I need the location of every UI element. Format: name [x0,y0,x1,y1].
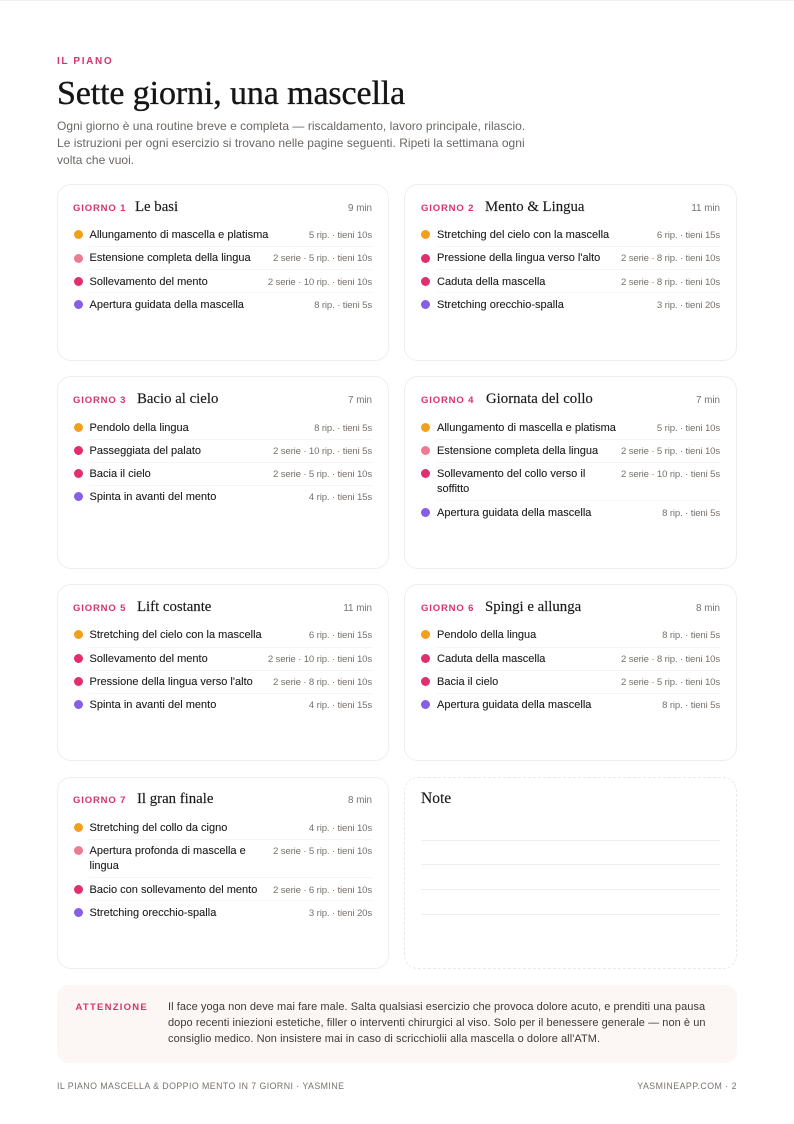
giorno 3 content: Spinta in avanti del mento [90,491,216,503]
giorno 3 content: Passeggiata del palato [90,445,201,457]
giorno 3 content: 7 min [348,395,372,406]
giorno 3 content: Bacia il cielo [90,468,151,480]
panel: giorno 4 [404,376,737,569]
giorno 6 content: Apertura guidata della mascella [437,699,591,711]
giorno 7 content: GIORNO 7 [73,795,126,806]
panel: note [404,777,737,969]
giorno 6 content: Bacia il cielo [437,676,498,688]
giorno 3 content: Bacio al cielo [137,391,218,407]
giorno 3 content: 4 rip. · tieni 15s [309,492,372,503]
intro text: Ogni giorno è una routine breve e completa — riscaldamento, lavoro principale, rilascio. [57,119,525,133]
giorno 4 content: soffitto [437,482,469,494]
footer left: IL PIANO MASCELLA & DOPPIO MENTO IN 7 GIORNI · YASMINE [57,1081,344,1091]
giorno 4 content: Estensione completa della lingua [437,445,598,457]
giorno 7 content: lingua [90,860,119,872]
giorno 2 content [421,199,720,311]
giorno 2 content: 6 rip. · tieni 15s [657,230,720,241]
giorno 1 content: GIORNO 1 [73,203,126,214]
giorno 4 content [421,391,720,519]
giorno 7 content: Stretching del collo da cigno [90,822,227,834]
giorno 1 content: Le basi [135,199,178,215]
intro text: Le istruzioni per ogni esercizio si trovano nelle pagine seguenti. Ripeti la settimana ogni [57,136,525,150]
giorno 4 content: 5 rip. · tieni 10s [657,423,720,434]
giorno 1 content [73,199,372,311]
panel: giorno 3 [57,376,389,569]
giorno 5 content: Stretching del cielo con la mascella [90,629,262,641]
giorno 2 content: Pressione della lingua verso l'alto [437,252,600,264]
callout text: dopo recenti iniezioni estetiche, filler o interventi chirurgici al viso. Solo per il benessere generale — non è un [168,1017,706,1029]
giorno 7 content: 4 rip. · tieni 10s [309,823,372,834]
giorno 5 content: Lift costante [137,599,211,615]
giorno 4 content: 7 min [696,395,720,406]
eyebrow: IL PIANO [57,56,113,67]
giorno 7 content: Il gran finale [137,791,213,807]
giorno 4 content: 2 serie · 5 rip. · tieni 10s [621,446,720,457]
panel: giorno 7 [57,777,389,969]
giorno 7 content [73,791,372,919]
giorno 4 content: Apertura guidata della mascella [437,507,591,519]
giorno 7 content: Apertura profonda di mascella e [90,845,246,857]
giorno 2 content: Caduta della mascella [437,276,545,288]
giorno 5 content: 2 serie · 8 rip. · tieni 10s [273,677,372,688]
giorno 6 content: GIORNO 6 [421,603,474,614]
title: Sette giorni, una mascella [57,75,405,112]
giorno 6 content: 8 rip. · tieni 5s [662,700,720,711]
giorno 2 content: Stretching orecchio-spalla [437,299,564,311]
giorno 2 content: Mento & Lingua [485,199,584,215]
intro text [57,119,525,167]
giorno 5 content: 11 min [343,603,372,614]
giorno 2 content: 3 rip. · tieni 20s [657,300,720,311]
giorno 2 content: 11 min [691,203,720,214]
giorno 5 content: 4 rip. · tieni 15s [309,700,372,711]
giorno 5 content [73,599,372,711]
intro text: volta che vuoi. [57,153,134,167]
callout text [168,1001,706,1045]
giorno 2 content: GIORNO 2 [421,203,474,214]
giorno 3 content: 2 serie · 5 rip. · tieni 10s [273,469,372,480]
giorno 2 content: 2 serie · 8 rip. · tieni 10s [621,277,720,288]
giorno 4 content: Sollevamento del collo verso il [437,468,585,480]
giorno 5 content: 2 serie · 10 rip. · tieni 10s [268,654,372,665]
giorno 5 content: Pressione della lingua verso l'alto [90,676,253,688]
panel: giorno 6 [404,584,737,761]
footer right: YASMINEAPP.COM · 2 [637,1081,737,1091]
callout text: Il face yoga non deve mai fare male. Salta qualsiasi esercizio che provoca dolore acuto, e prenditi una pausa [168,1001,705,1013]
giorno 6 content: 2 serie · 5 rip. · tieni 10s [621,677,720,688]
giorno 5 content: Spinta in avanti del mento [90,699,216,711]
giorno 2 content: Stretching del cielo con la mascella [437,229,609,241]
panel: giorno 1 [57,184,389,361]
giorno 4 content: 8 rip. · tieni 5s [662,508,720,519]
giorno 7 content: 2 serie · 5 rip. · tieni 10s [273,846,372,857]
callout: attenzione [57,985,737,1063]
giorno 1 content: 8 rip. · tieni 5s [314,300,372,311]
giorno 3 content: GIORNO 3 [73,395,126,406]
giorno 3 content: 2 serie · 10 rip. · tieni 5s [273,446,372,457]
giorno 7 content: 8 min [348,795,372,806]
giorno 1 content: 2 serie · 10 rip. · tieni 10s [268,277,372,288]
giorno 7 content: 2 serie · 6 rip. · tieni 10s [273,885,372,896]
panel: giorno 2 [404,184,737,361]
giorno 1 content: Sollevamento del mento [90,276,208,288]
giorno 1 content: 5 rip. · tieni 10s [309,230,372,241]
giorno 4 content: Allungamento di mascella e platisma [437,422,616,434]
giorno 6 content: Spingi e allunga [485,599,581,615]
panel: giorno 5 [57,584,389,761]
giorno 6 content: 8 min [696,603,720,614]
callout text: consiglio medico. Non insistere mai in caso di scricchiolii alla mascella o dolore all'ATM. [168,1033,600,1045]
giorno 6 content: 8 rip. · tieni 5s [662,630,720,641]
giorno 6 content: Caduta della mascella [437,653,545,665]
giorno 3 content: Pendolo della lingua [90,422,189,434]
giorno 7 content: Stretching orecchio-spalla [90,907,216,919]
giorno 6 content: Pendolo della lingua [437,629,536,641]
giorno 1 content: 2 serie · 5 rip. · tieni 10s [273,253,372,264]
giorno 6 content [421,599,720,711]
giorno 1 content: Estensione completa della lingua [90,252,251,264]
giorno 4 content: 2 serie · 10 rip. · tieni 5s [621,469,720,480]
giorno 4 content: Giornata del collo [486,391,593,407]
callout label: ATTENZIONE [76,1002,148,1013]
giorno 1 content: Apertura guidata della mascella [90,299,244,311]
giorno 5 content: GIORNO 5 [73,603,126,614]
giorno 1 content: Allungamento di mascella e platisma [90,229,268,241]
giorno 5 content: 6 rip. · tieni 15s [309,630,372,641]
giorno 6 content: 2 serie · 8 rip. · tieni 10s [621,654,720,665]
giorno 7 content: 3 rip. · tieni 20s [309,908,372,919]
giorno 5 content: Sollevamento del mento [90,653,208,665]
giorno 7 content: Bacio con sollevamento del mento [90,884,257,896]
note lines [421,840,720,915]
giorno 3 content: 8 rip. · tieni 5s [314,423,372,434]
note heading: Note [421,790,451,807]
giorno 3 content [73,391,372,503]
giorno 2 content: 2 serie · 8 rip. · tieni 10s [621,253,720,264]
giorno 1 content: 9 min [348,203,372,214]
giorno 4 content: GIORNO 4 [421,395,474,406]
top hairline [0,0,794,1]
